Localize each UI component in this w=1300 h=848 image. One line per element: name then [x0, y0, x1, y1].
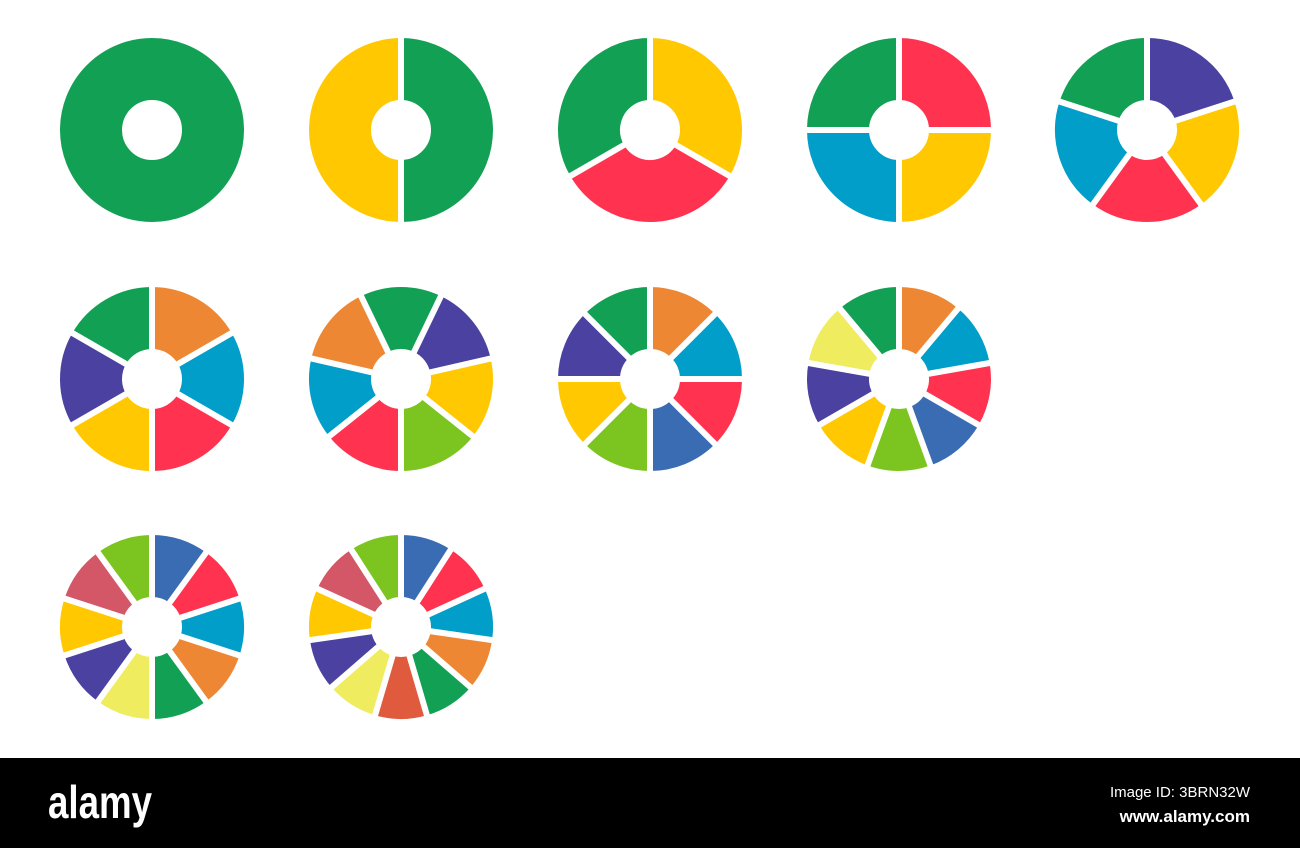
chart 2: two segments	[340, 35, 462, 225]
image id text: Image ID: 3BRN32W	[1110, 784, 1251, 801]
chart 3: three segments	[567, 35, 733, 213]
chart 6: six segments	[69, 284, 235, 474]
chart 10: ten segments	[62, 532, 242, 722]
footer bar	[0, 758, 1300, 848]
website text: www.alamy.com	[1119, 807, 1250, 826]
chart 1: single segment donut	[91, 69, 213, 191]
chart 11: eleven segments	[307, 532, 495, 718]
logo text: alamy	[48, 776, 152, 828]
chart 7: seven segments	[308, 293, 494, 474]
chart 4: four segments	[804, 35, 994, 225]
chart 8: eight segments	[555, 284, 745, 474]
chart 5: five segments	[1057, 35, 1237, 215]
chart 9: nine segments	[805, 284, 993, 468]
